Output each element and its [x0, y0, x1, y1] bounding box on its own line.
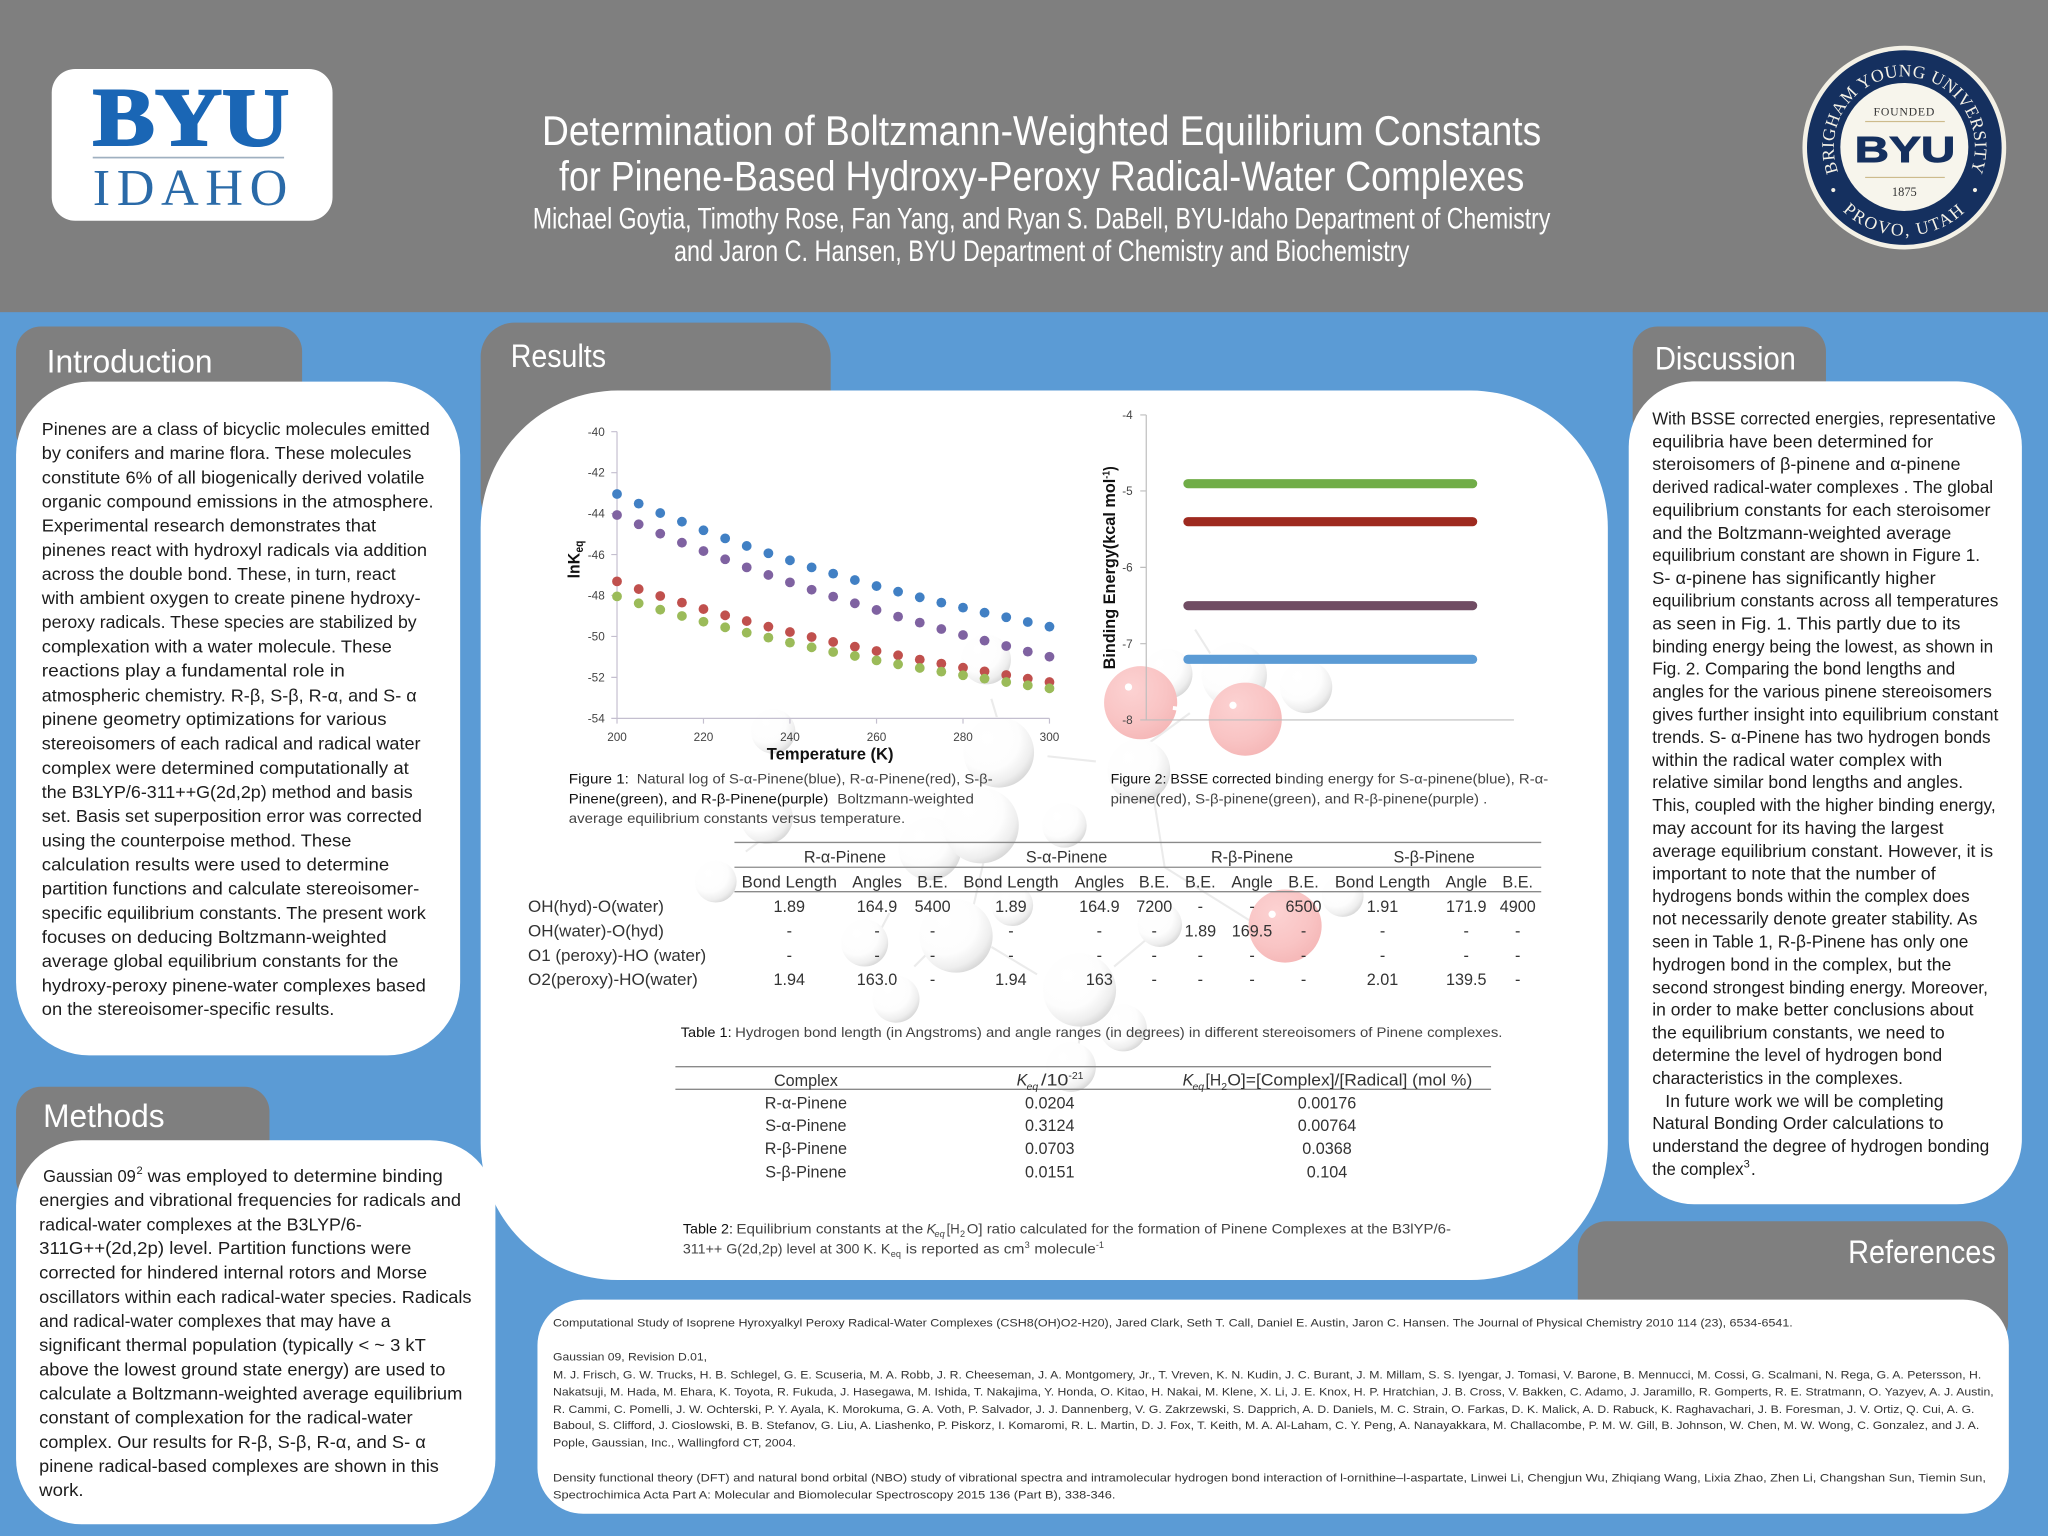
y axis labels: -7	[1122, 638, 1133, 651]
chart: figure 1 lnKeq vs temperature	[566, 426, 1060, 764]
logo: BYU Idaho: IDAHO	[93, 159, 287, 217]
panel: discussion	[1629, 327, 2022, 1204]
text block: references: Density functional theory (DFT) and natural bond orbital (NBO) study of vibrational spectra and intramolecular hydrogen bond interaction of l-ornithine–l-aspartate, Linwei Li, Chengjun Wu, Zhiqiang Wang, Lixia Zhao, Zhen Li, Changshan Sun, Tiemin Sun,	[553, 1472, 1986, 1484]
molecule watermark	[695, 630, 1364, 1092]
table 1 row: O2(peroxy)-HO(water): -	[1249, 971, 1255, 989]
table 1 row: OH(water)-O(hyd): -	[1380, 922, 1385, 940]
y axis labels	[1122, 409, 1133, 727]
text block: discussion: the equilibrium constants, we need to	[1652, 1022, 1945, 1042]
table 1 row: O2(peroxy)-HO(water): 163.0	[857, 971, 897, 989]
y axis labels: -4	[1122, 409, 1133, 422]
text block: discussion: With BSSE corrected energies, representative	[1652, 408, 1996, 428]
y axis labels: -48	[588, 590, 605, 603]
logo: BYU seal: PROVO, UTAH	[1842, 202, 1964, 238]
table 1 column headers: Bond Length	[1335, 874, 1430, 892]
caption: table 2: O] ratio calculated for the formation of Pinene Complexes at the B3lYP/6-	[967, 1220, 1451, 1236]
table 1 row: O1 (peroxy)-HO (water): -	[1097, 947, 1102, 965]
heading: references: References	[1848, 1234, 1996, 1270]
text block: introduction: complexation with a water molecule. These	[42, 636, 392, 656]
text block: discussion: steroisomers of β-pinene and α-pinene	[1652, 454, 1961, 474]
text block: introduction: complex were determined computationally at	[42, 758, 409, 778]
table 1 column headers: B.E.	[1185, 874, 1216, 892]
text block: discussion: equilibrium constant are shown in Figure 1.	[1652, 545, 1980, 565]
table 1 row: O1 (peroxy)-HO (water): -	[930, 947, 935, 965]
text block: discussion: determine the level of hydrogen bond	[1652, 1045, 1942, 1065]
table 1 row: O1 (peroxy)-HO (water): -	[1008, 947, 1014, 965]
table 2 header: 2	[1221, 1082, 1227, 1093]
table 2 header	[774, 1071, 1472, 1093]
table 1 column headers: Angles	[1075, 874, 1124, 892]
table 1 row: OH(hyd)-O(water): 6500	[1286, 898, 1322, 916]
table 1 row: O1 (peroxy)-HO (water): -	[787, 947, 792, 965]
line: R-alpha-pinene red	[1188, 518, 1473, 525]
text block: introduction: Pinenes are a class of bicyclic molecules emitted	[42, 419, 430, 439]
table 1 column headers	[742, 874, 1533, 892]
text block: introduction: reactions play a fundamental role in	[42, 661, 345, 681]
y axis labels: -40	[588, 426, 605, 439]
table 1 row: O1 (peroxy)-HO (water): -	[1515, 947, 1520, 965]
text block: discussion: within the radical water complex with	[1651, 750, 1942, 770]
caption: table 2: eq	[891, 1249, 901, 1259]
caption: table 2: K	[927, 1220, 937, 1236]
text block: methods: was employed to determine binding	[147, 1166, 443, 1186]
text block: introduction: on the stereoisomer-specific results.	[42, 999, 334, 1019]
table 1 row: OH(hyd)-O(water): 4900	[1500, 898, 1536, 916]
text block: discussion: understand the degree of hydrogen bonding	[1652, 1136, 1989, 1156]
table 1 row: O1 (peroxy)-HO (water): -	[1464, 947, 1469, 965]
table 1 column headers: B.E.	[1139, 874, 1170, 892]
y axis labels	[588, 426, 605, 726]
x axis labels: 200	[607, 731, 627, 744]
text block: discussion: Fig. 2. Comparing the bond lengths and	[1652, 659, 1955, 679]
table 1 row: OH(hyd)-O(water): 5400	[915, 898, 951, 916]
text block: discussion: In future work we will be completing	[1665, 1091, 1944, 1111]
table 1 row: O1 (peroxy)-HO (water)	[528, 947, 1520, 965]
text block: introduction: pinene geometry optimizations for various	[42, 709, 387, 729]
table 1 group headers: S-β-Pinene	[1393, 849, 1475, 867]
text block: discussion: the complex	[1652, 1159, 1744, 1179]
table 1 row: OH(hyd)-O(water): 171.9	[1446, 898, 1487, 916]
text block: introduction: set. Basis set superposition error was corrected	[42, 806, 422, 826]
y axis labels: -52	[588, 672, 605, 685]
series: S-alpha-pinene blue	[612, 489, 1054, 632]
table 2 row: S-alpha: 0.3124	[1025, 1117, 1074, 1135]
text block: discussion: seen in Table 1, R-β-Pinene has only one	[1652, 932, 1968, 952]
table 1 group headers	[804, 849, 1475, 867]
text block: discussion: trends. S- α-Pinene has two hydrogen bonds	[1652, 727, 1991, 747]
caption: table 2: is reported as cm	[906, 1240, 1024, 1256]
table 2 row: R-beta: R-β-Pinene	[765, 1140, 847, 1158]
x axis labels: 220	[694, 731, 714, 744]
y axis labels: -8	[1122, 714, 1133, 727]
table 1 group headers: R-β-Pinene	[1211, 849, 1293, 867]
header band	[0, 0, 2048, 312]
table 1 column headers: Bond Length	[742, 874, 837, 892]
text block: discussion: equilibria have been determined for	[1652, 431, 1933, 451]
table 2 header: K	[1183, 1071, 1195, 1089]
table 2 row: S-beta	[765, 1164, 1347, 1182]
text block: discussion: angles for the various pinene stereoisomers	[1652, 681, 1992, 701]
text block: discussion: gives further insight into equilibrium constant	[1652, 704, 1998, 724]
text block: references: M. J. Frisch, G. W. Trucks, H. B. Schlegel, G. E. Scuseria, M. A. Robb, J. R. Cheeseman, J. A. Montgomery, Jr., T. Vreven, K. N. Kudin, J. C. Burant, J. M. Millam, S. S. Iyengar, J. Tomasi, V. Barone, B. Mennucci, M. Cossi, G. Scalmani, N. Rega, G. A. Petersson, H.	[553, 1369, 1981, 1381]
table 1 row: O1 (peroxy)-HO (water): -	[1380, 947, 1385, 965]
caption: figure 1: Natural log of S-α-Pinene(blue), R-α-Pinene(red), S-β-	[637, 771, 993, 787]
table 1 row: O2(peroxy)-HO(water): 1.94	[774, 971, 805, 989]
panel: results	[481, 323, 1608, 1280]
series: S-beta-pinene green	[612, 591, 1054, 693]
text block: introduction: focuses on deducing Boltzmann-weighted	[42, 927, 387, 947]
table 2 header: Complex	[774, 1072, 838, 1090]
table 1 row: OH(water)-O(hyd): -	[1301, 922, 1306, 940]
table 1 row: O2(peroxy)-HO(water): 2.01	[1367, 971, 1398, 989]
heading: introduction: Introduction	[47, 344, 213, 380]
text block: discussion: in order to make better conclusions about	[1652, 1000, 1974, 1020]
table 1 row: O2(peroxy)-HO(water): -	[1301, 971, 1306, 989]
text block: discussion: S- α-pinene has significantly higher	[1652, 568, 1936, 588]
table 2 header: eq	[1027, 1082, 1038, 1093]
text block: discussion: 3	[1744, 1159, 1750, 1171]
table 1 row: O1 (peroxy)-HO (water): -	[1301, 947, 1306, 965]
x axis labels: 280	[953, 731, 973, 744]
caption: figure 2: pinene(red), S-β-pinene(green), and R-β-pinene(purple) .	[1111, 790, 1487, 806]
table 1 row: OH(hyd)-O(water): 7200	[1136, 898, 1172, 916]
x axis labels: 300	[1040, 731, 1060, 744]
text block: introduction: with ambient oxygen to create pinene hydroxy-	[41, 588, 421, 608]
text block: introduction: organic compound emissions in the atmosphere.	[42, 491, 434, 511]
y axis title	[566, 541, 586, 578]
table 1 row: OH(water)-O(hyd): -	[930, 922, 935, 940]
table 1 group headers: S-α-Pinene	[1026, 849, 1107, 867]
text block: references: Pople, Gaussian, Inc., Wallingford CT, 2004.	[553, 1437, 796, 1449]
text block: discussion: Natural Bonding Order calculations to	[1652, 1113, 1944, 1133]
table 1 row: OH(hyd)-O(water): -	[1249, 898, 1255, 916]
text block: references: Baboul, S. Clifford, J. Cioslowski, B. B. Stefanov, G. Liu, A. Liashenko, P. Piskorz, I. Komaromi, R. L. Martin, D. J. Fox, T. Keith, M. A. Al-Laham, C. Y. Peng, A. Nanayakkara, M. Challacombe, P. M. W. Gill, B. Johnson, W. Chen, M. W. Wong, C. Gonzalez, and J. A.	[553, 1420, 1979, 1432]
chart: figure 2 binding energy	[1101, 409, 1514, 727]
table 1 row: OH(hyd)-O(water): 164.9	[1079, 898, 1120, 916]
heading: results: Results	[511, 338, 606, 374]
text block: introduction	[41, 419, 434, 1019]
y axis title: )	[1101, 466, 1119, 471]
text block: introduction: calculation results were used to determine	[42, 855, 389, 875]
text block: introduction: partition functions and calculate stereoisomer-	[42, 879, 419, 899]
caption: table 1: Table 1:	[681, 1024, 732, 1040]
table 2 row: R-alpha: R-α-Pinene	[765, 1095, 847, 1113]
text block: references	[553, 1317, 1994, 1501]
table 1 row: OH(water)-O(hyd)	[528, 922, 1520, 940]
logo: BYU seal: BYU	[1855, 129, 1955, 170]
title: for Pinene-Based Hydroxy-Peroxy Radical-Water Complexes	[559, 153, 1524, 200]
table 1 row: OH(water)-O(hyd): -	[1008, 922, 1014, 940]
table 1 row: O2(peroxy)-HO(water): 1.94	[995, 971, 1027, 989]
text block: introduction: atmospheric chemistry. R-β, S-β, R-α, and S- α	[42, 685, 417, 705]
table 1 row: O2(peroxy)-HO(water)	[528, 971, 1520, 989]
text block: methods: significant thermal population (typically < ~ 3 kT	[39, 1335, 426, 1355]
table 2 header: [H	[1206, 1071, 1221, 1089]
caption: table 1: Hydrogen bond length (in Angstroms) and angle ranges (in degrees) in different stereoisomers of Pinene complexes.	[735, 1024, 1502, 1040]
logo: BYU seal: BRIGHAM YOUNG UNIVERSITY	[1822, 64, 1987, 175]
text block: discussion: equilibrium constants across all temperatures	[1652, 591, 1998, 611]
table 1 row: O1 (peroxy)-HO (water): -	[1152, 947, 1157, 965]
table 2 row: R-alpha	[765, 1095, 1356, 1113]
table 1 row: O1 (peroxy)-HO (water): -	[874, 947, 880, 965]
table 2 row: S-alpha: S-α-Pinene	[765, 1117, 847, 1135]
text block: discussion: This, coupled with the higher binding energy,	[1652, 795, 1996, 815]
text block: references: Gaussian 09, Revision D.01,	[553, 1352, 707, 1364]
text block: methods: complex. Our results for R-β, S-β, R-α, and S- α	[39, 1432, 426, 1452]
table 1 column headers: Angle	[1231, 874, 1273, 892]
table 1: hydrogen bonds	[528, 842, 1541, 989]
table 1 row: O1 (peroxy)-HO (water): -	[1249, 947, 1255, 965]
text block: discussion: important to note that the number of	[1652, 864, 1936, 884]
caption: figure 1: Figure 1:	[569, 771, 629, 787]
table 1 row: OH(water)-O(hyd): -	[1097, 922, 1102, 940]
text block: discussion: .	[1751, 1159, 1756, 1179]
x axis labels: 240	[780, 731, 800, 744]
caption: table 2: -1	[1096, 1240, 1104, 1250]
title: Determination of Boltzmann-Weighted Equilibrium Constants	[542, 107, 1541, 154]
table 2 row: R-alpha: 0.00176	[1298, 1095, 1356, 1113]
text block: introduction: using the counterpoise method. These	[42, 830, 351, 850]
table 1 column headers: Angle	[1446, 874, 1487, 892]
table 1 column headers: Angles	[852, 874, 902, 892]
text block: discussion: hydrogens bonds within the complex does	[1652, 886, 1970, 906]
caption: table 2: [H	[947, 1220, 960, 1236]
caption: table 2: 2	[960, 1229, 965, 1239]
authors: Michael Goytia, Timothy Rose, Fan Yang, and Ryan S. DaBell, BYU-Idaho Department of Chemistry	[533, 203, 1550, 236]
text block: references: Spectrochimica Acta Part A: Molecular and Biomolecular Spectroscopy 2015 136 (Part B), 338-346.	[553, 1489, 1115, 1501]
table 1 row: O1 (peroxy)-HO (water): O1 (peroxy)-HO (water)	[528, 947, 706, 965]
text block: methods: corrected for hindered internal rotors and Morse	[39, 1263, 427, 1283]
text block: introduction: hydroxy-peroxy pinene-water complexes based	[42, 975, 426, 995]
table 1 column headers: B.E.	[917, 874, 948, 892]
table 1 row: OH(hyd)-O(water): -	[1198, 898, 1203, 916]
line: R-beta-pinene purple	[1188, 602, 1473, 609]
table 2 row: S-beta: 0.0151	[1025, 1164, 1074, 1182]
caption: figure 2: inding energy for S-α-pinene(blue), R-α-	[1284, 771, 1548, 787]
y axis labels: -42	[588, 467, 605, 480]
text block: discussion: not necessarily denote greater stability. As	[1652, 909, 1978, 929]
table 2 row: S-beta: S-β-Pinene	[765, 1164, 847, 1182]
text block: discussion: hydrogen bond in the complex, but the	[1652, 954, 1951, 974]
caption: table 2: molecule	[1034, 1240, 1096, 1256]
text block: discussion: equilibrium constants for each steroisomer	[1652, 500, 1991, 520]
text block: references: Nakatsuji, M. Hada, M. Ehara, K. Toyota, R. Fukuda, J. Hasegawa, M. Ishida, T. Nakajima, Y. Honda, O. Kitao, H. Nakai, M. Klene, X. Li, J. E. Knox, H. P. Hratchian, J. B. Cross, V. Bakken, C. Adamo, J. Jaramillo, R. Gomperts, R. E. Stratmann, O. Yazyev, A. J. Austin,	[553, 1387, 1994, 1399]
caption: table 2: Equilibrium constants at the	[736, 1220, 923, 1236]
text block: methods: pinene radical-based complexes are shown in this	[39, 1456, 439, 1476]
text block: introduction: stereoisomers of each radical and radical water	[42, 734, 421, 754]
table 1 row: O2(peroxy)-HO(water): 163	[1086, 971, 1113, 989]
authors	[533, 203, 1550, 268]
heading: discussion: Discussion	[1655, 341, 1796, 377]
table 1 row: OH(water)-O(hyd): -	[1515, 922, 1520, 940]
x axis title: Temperature (K)	[767, 746, 894, 764]
table 1 row: OH(water)-O(hyd): -	[1152, 922, 1157, 940]
text block: discussion: derived radical-water complexes . The global	[1652, 477, 1993, 497]
text block: introduction: Experimental research demonstrates that	[42, 516, 376, 536]
text block: introduction: across the double bond. These, in turn, react	[42, 564, 396, 584]
caption: figure 2	[1111, 771, 1548, 806]
table 2 row: R-alpha: 0.0204	[1025, 1095, 1074, 1113]
table 2 row: S-beta: 0.104	[1307, 1164, 1347, 1182]
table 1 row: OH(hyd)-O(water): 1.89	[995, 898, 1027, 916]
table 1 row: OH(water)-O(hyd): -	[1464, 922, 1469, 940]
table 1 row: OH(hyd)-O(water): 1.89	[774, 898, 805, 916]
text block: methods: energies and vibrational frequencies for radicals and	[39, 1190, 461, 1210]
title	[542, 107, 1541, 200]
caption: figure 2: Figure 2: BSSE corrected b	[1111, 771, 1283, 787]
table 2 row: S-alpha: 0.00764	[1298, 1117, 1356, 1135]
text block: methods: radical-water complexes at the B3LYP/6-	[39, 1214, 362, 1234]
text block: methods: Gaussian 09	[43, 1166, 136, 1186]
table 1 row: OH(hyd)-O(water): 164.9	[857, 898, 897, 916]
text block: discussion: characteristics in the complexes.	[1652, 1068, 1903, 1088]
table 1 row: O2(peroxy)-HO(water): -	[1198, 971, 1203, 989]
text block: discussion: and the Boltzmann-weighted average	[1652, 523, 1951, 543]
caption: figure 1: Pinene(green), and R-β-Pinene(purple)	[569, 790, 828, 806]
table 1 column headers: Bond Length	[963, 874, 1059, 892]
table 2 row: R-beta: 0.0703	[1025, 1140, 1074, 1158]
x axis labels	[607, 731, 1060, 744]
caption: table 2: 311++ G(2d,2p) level at 300 K. K	[683, 1240, 891, 1256]
text block: methods: oscillators within each radical-water species. Radicals	[39, 1287, 472, 1307]
table 1 row: O2(peroxy)-HO(water): -	[1152, 971, 1157, 989]
text block: introduction: specific equilibrium constants. The present work	[42, 903, 426, 923]
logo: BYU seal: 1875	[1892, 185, 1917, 199]
table 1 row: OH(water)-O(hyd): -	[787, 922, 792, 940]
logo: BYU Idaho: BYU	[93, 72, 289, 163]
table 1 column headers: B.E.	[1288, 874, 1319, 892]
y axis labels: -6	[1122, 562, 1133, 575]
table 2 header: O]=[Complex]/[Radical] (mol %)	[1227, 1071, 1472, 1089]
text block: introduction: the B3LYP/6-311++G(2d,2p) method and basis	[42, 782, 413, 802]
y axis title: eq	[573, 541, 586, 552]
panel: references	[537, 1221, 2009, 1514]
text block: methods: 2	[136, 1165, 143, 1177]
text block: discussion: as seen in Fig. 1. This partly due to its	[1652, 614, 1961, 634]
y axis title: Binding Energy(kcal mol	[1101, 479, 1119, 669]
text block: methods: calculate a Boltzmann-weighted average equilibrium	[39, 1384, 462, 1404]
caption: figure 1: average equilibrium constants versus temperature.	[569, 810, 905, 826]
text block: discussion	[1651, 408, 1998, 1179]
table 1 row: OH(hyd)-O(water): 1.91	[1367, 898, 1398, 916]
table 2 header: /10	[1041, 1071, 1068, 1089]
logo: BYU seal: FOUNDED	[1874, 106, 1935, 119]
table 2 header: -21	[1068, 1071, 1084, 1082]
panel: methods	[16, 1087, 495, 1524]
panel: introduction	[16, 327, 460, 1055]
table 2 header: eq	[1192, 1082, 1204, 1093]
logo: BYU seal	[1802, 46, 2006, 250]
table 1 row: O2(peroxy)-HO(water): O2(peroxy)-HO(water)	[528, 971, 698, 989]
table 1 row: O2(peroxy)-HO(water): 139.5	[1446, 971, 1487, 989]
text block: discussion: average equilibrium constant. However, it is	[1652, 841, 1993, 861]
table 2: equilibrium constants	[675, 1067, 1491, 1182]
table 1 row: OH(water)-O(hyd): -	[874, 922, 880, 940]
text block: discussion: second strongest binding energy. Moreover,	[1652, 977, 1988, 997]
y axis labels: -50	[588, 631, 605, 644]
text block: methods	[38, 1165, 472, 1500]
y axis title: lnK	[566, 553, 584, 578]
text block: introduction: average global equilibrium constants for the	[42, 951, 398, 971]
caption: table 2: Table 2:	[683, 1220, 733, 1236]
y axis title: -1	[1102, 470, 1113, 479]
text block: discussion: binding energy being the lowest, as shown in	[1652, 636, 1993, 656]
caption: table 2	[683, 1220, 1451, 1259]
text block: methods: above the lowest ground state energy) are used to	[39, 1359, 446, 1379]
table 1 column headers: B.E.	[1502, 874, 1533, 892]
text block: methods: and radical-water complexes that may have a	[39, 1311, 391, 1331]
text block: methods: work.	[38, 1480, 84, 1500]
table 2 row: R-beta	[765, 1140, 1352, 1158]
y axis labels: -54	[588, 713, 605, 726]
table 1 row: OH(hyd)-O(water)	[528, 898, 1536, 916]
authors: and Jaron C. Hansen, BYU Department of Chemistry and Biochemistry	[674, 235, 1409, 268]
table 2 header: K	[1017, 1071, 1029, 1089]
table 1 row: OH(water)-O(hyd): 169.5	[1232, 922, 1272, 940]
text block: references: R. Cammi, C. Pomelli, J. W. Ochterski, P. Y. Ayala, K. Morokuma, G. A. Voth, P. Salvador, J. J. Dannenberg, V. G. Zakrzewski, S. Dapprich, A. D. Daniels, M. C. Strain, O. Farkas, D. K. Malick, A. D. Rabuck, K. Raghavachari, J. B. Foresman, J. V. Ortiz, Q. Cui, A. G.	[553, 1404, 1974, 1416]
table 1 row: O1 (peroxy)-HO (water): -	[1198, 947, 1203, 965]
table 1 row: OH(water)-O(hyd): 1.89	[1185, 922, 1216, 940]
text block: introduction: pinenes react with hydroxyl radicals via addition	[42, 540, 427, 560]
caption: figure 1	[569, 771, 993, 826]
table 1 row: OH(hyd)-O(water): OH(hyd)-O(water)	[528, 898, 664, 916]
y axis labels: -5	[1122, 485, 1133, 498]
text block: introduction: by conifers and marine flora. These molecules	[42, 443, 412, 463]
text block: introduction: peroxy radicals. These species are stabilized by	[42, 612, 417, 632]
caption: table 2: eq	[935, 1229, 946, 1239]
series: R-beta-pinene purple	[612, 510, 1054, 662]
text block: discussion: relative similar bond lengths and angles.	[1652, 772, 1963, 792]
table 2 row: R-beta: 0.0368	[1302, 1140, 1352, 1158]
line: S-beta-pinene green	[1188, 480, 1473, 487]
x axis labels: 260	[867, 731, 887, 744]
text block: methods: constant of complexation for the radical-water	[39, 1408, 413, 1428]
caption: figure 1: Boltzmann-weighted	[837, 790, 974, 806]
table 2 row: S-alpha	[765, 1117, 1356, 1135]
series: R-alpha-pinene red	[612, 576, 1054, 687]
text block: references: Computational Study of Isoprene Hyroxyalkyl Peroxy Radical-Water Complexes (CSH8(OH)O2-H20), Jared Clark, Seth T. Call, Daniel E. Austin, Jaron C. Hansen. The Journal of Physical Chemistry 2010 114 (23), 6534-6541.	[553, 1317, 1793, 1329]
logo: BYU Idaho	[52, 69, 333, 221]
y axis labels: -44	[588, 508, 605, 521]
table 1 group headers: R-α-Pinene	[804, 849, 886, 867]
heading: methods: Methods	[43, 1098, 165, 1134]
caption: table 2: 3	[1025, 1240, 1030, 1250]
text block: introduction: constitute 6% of all biogenically derived volatile	[42, 467, 425, 487]
table 1 row: O2(peroxy)-HO(water): -	[930, 971, 935, 989]
table 1 row: O2(peroxy)-HO(water): -	[1515, 971, 1520, 989]
line: S-alpha-pinene blue	[1188, 656, 1473, 663]
y axis labels: -46	[588, 549, 605, 562]
text block: discussion: may account for its having the largest	[1652, 818, 1944, 838]
table 1 row: OH(water)-O(hyd): OH(water)-O(hyd)	[528, 922, 664, 940]
text block: methods: 311G++(2d,2p) level. Partition functions were	[39, 1238, 412, 1258]
